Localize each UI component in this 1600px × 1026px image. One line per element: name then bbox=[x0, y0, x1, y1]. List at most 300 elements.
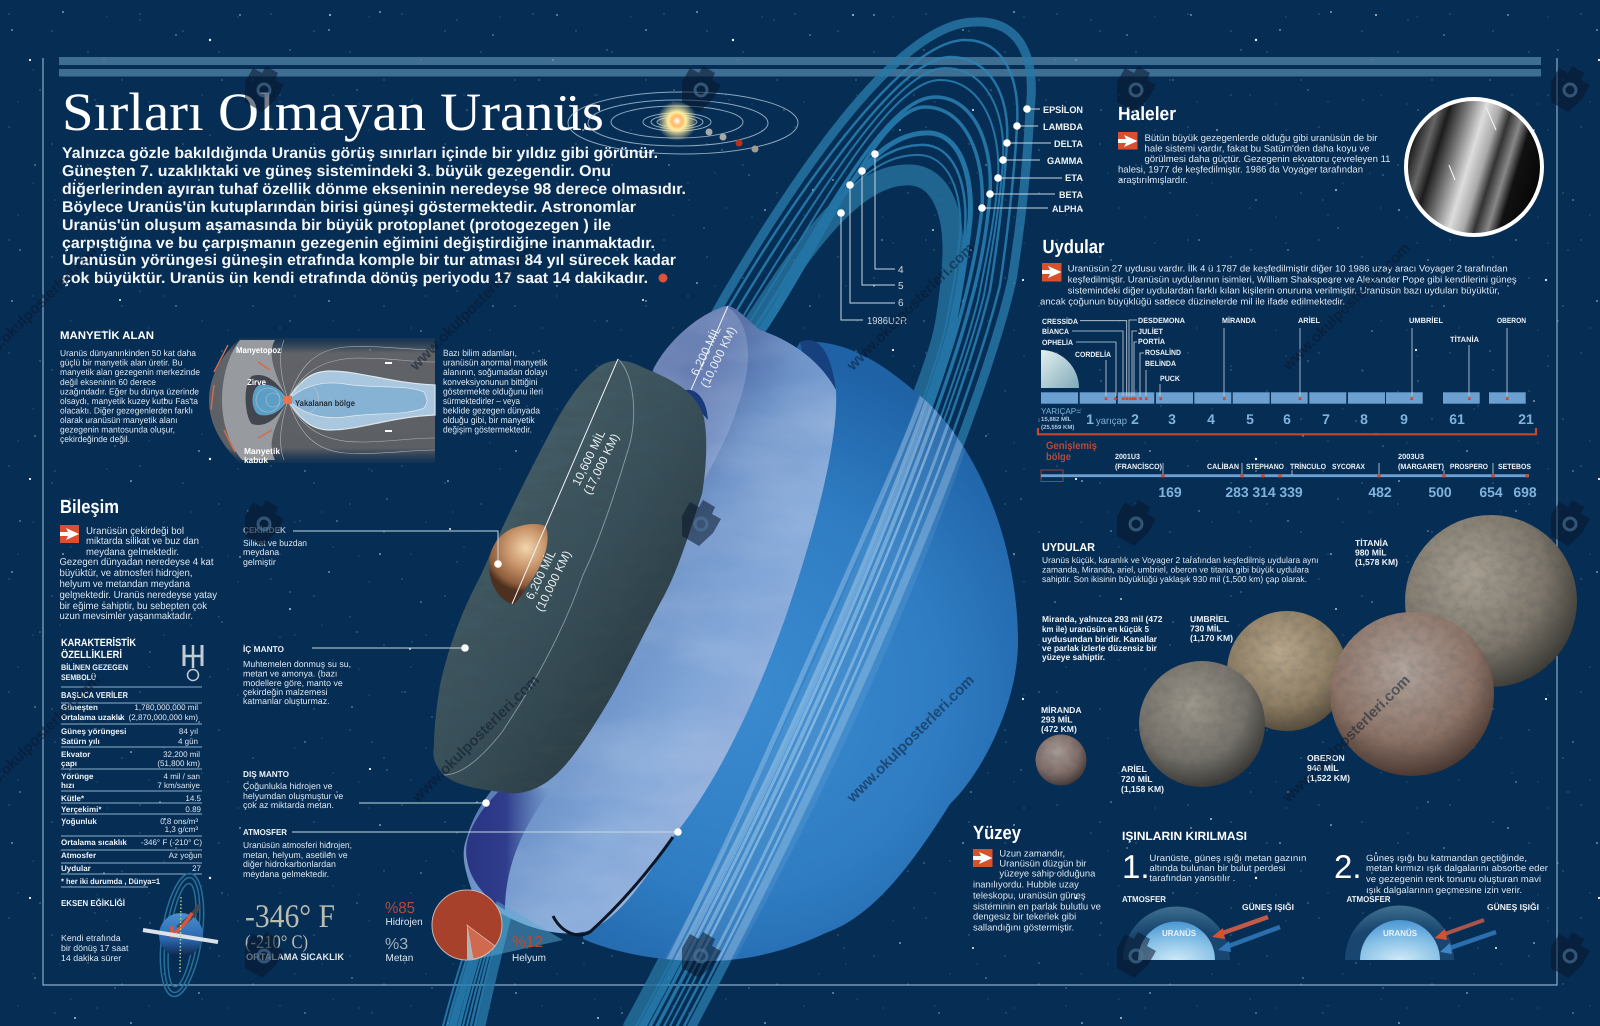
paragraph: sisteminin en parlak bulutlu ve bbox=[973, 900, 1101, 912]
outer moon names: CALİBAN bbox=[1207, 462, 1239, 471]
table values: 14.5 bbox=[185, 794, 202, 803]
ring labels left: 5 bbox=[898, 281, 904, 292]
moon names: CRESSİDA bbox=[1042, 317, 1078, 326]
step 2: URANÜS bbox=[1383, 928, 1417, 938]
radius numbers: YARIÇAP= bbox=[1041, 406, 1081, 416]
paragraph left: gezegenin mantosunda oluşur, bbox=[60, 424, 175, 434]
moon labels: (1,158 KM) bbox=[1121, 784, 1164, 794]
distances: 169 bbox=[1158, 484, 1182, 500]
radius numbers: 61 bbox=[1449, 411, 1465, 427]
ring labels right bbox=[978, 104, 1083, 215]
icon: red arrow bbox=[60, 525, 79, 543]
outer moon names: (MARGARET) bbox=[1398, 462, 1444, 471]
outer moon names: STEPHANO bbox=[1246, 462, 1284, 471]
table values: Yoğunluk bbox=[61, 817, 97, 826]
zone label: bölge bbox=[1046, 451, 1071, 463]
table values: 0,8 ons/m³ bbox=[160, 817, 198, 826]
composition pie chart bbox=[385, 890, 563, 964]
table values: Az yoğun bbox=[169, 851, 202, 860]
radius numbers: 1 bbox=[1086, 411, 1094, 427]
heading: Bileşim bbox=[60, 497, 119, 518]
leader lines bbox=[1072, 320, 1507, 396]
watermark: website text bbox=[0, 240, 1414, 807]
table values: Ekvator bbox=[61, 750, 90, 759]
table values: -346° F (-210° C) bbox=[141, 838, 202, 847]
paragraph: Uranüsün çekirdeği bol bbox=[86, 526, 184, 537]
heading: Yüzey bbox=[973, 823, 1021, 844]
panel: large moons bbox=[1036, 515, 1577, 794]
watermark: website text: www.okulposterleri.com bbox=[1279, 240, 1414, 375]
table values: (51,800 km) bbox=[157, 759, 200, 768]
paragraph bbox=[60, 526, 217, 622]
table values: Uydular bbox=[61, 864, 91, 873]
paragraph: Bütün büyük gezegenlerde olduğu gibi uranüsün de bir bbox=[1144, 133, 1378, 144]
radius numbers: 5 bbox=[1246, 411, 1254, 427]
moon labels: TİTANİA bbox=[1355, 538, 1388, 548]
rings of Uranus behind the planet bbox=[442, 22, 1031, 1026]
table values: 84 yıl bbox=[179, 727, 198, 736]
moon labels: (1,170 KM) bbox=[1190, 633, 1233, 643]
watermark: website text: www.okulposterleri.com bbox=[1279, 672, 1414, 807]
label: outer mantle: Çoğunlukla hidrojen ve bbox=[243, 781, 333, 791]
ring labels right: LAMBDA bbox=[1043, 122, 1083, 133]
radius numbers: 9 bbox=[1400, 411, 1408, 427]
label: core: Silikat ve buzdan bbox=[243, 538, 307, 548]
dome 2 bbox=[1345, 905, 1454, 960]
radius numbers: 7 bbox=[1322, 411, 1330, 427]
paragraph right: olduğu gibi, bir manyetik bbox=[443, 415, 535, 425]
paragraph left: değil ekseninin 60 derece bbox=[60, 377, 156, 387]
rim of atmosphere opening bbox=[800, 340, 836, 390]
chart: moon distance scale bbox=[1038, 316, 1536, 434]
moon labels: (1,578 KM) bbox=[1355, 557, 1398, 567]
heading: MANYETİK ALAN bbox=[60, 329, 154, 342]
magnetosphere diagram: Zirve bbox=[247, 377, 266, 387]
temperature: -346° F bbox=[245, 899, 335, 935]
moon names: PORTİA bbox=[1138, 337, 1165, 346]
paragraph: Kendi etrafında bbox=[61, 933, 121, 943]
panel: magnetic field bbox=[60, 329, 548, 465]
label: outer mantle: çok az miktarda metan. bbox=[243, 800, 334, 810]
radius numbers: 6 bbox=[1283, 411, 1291, 427]
paragraph: yüzeye sahip olduğuna bbox=[999, 868, 1096, 878]
step 1: GÜNEŞ IŞIĞI bbox=[1242, 902, 1294, 912]
panel: characteristics table bbox=[61, 637, 202, 887]
intro text: Güneşten 7. uzaklıktaki ve güneş sistemindeki 3. büyük gezegendir. Onu bbox=[62, 163, 611, 180]
Miranda note: yüzeye sahiptir. bbox=[1042, 652, 1105, 662]
paragraph right: sürmektedirler – veya bbox=[443, 396, 520, 406]
watermark: website text: www.okulposterleri.com bbox=[843, 672, 978, 807]
paragraph: keşfedilmiştir. Uranüsün uydularının isimleri, William Shakspeare ve Alexander Pope gibi kendilerini güneş bbox=[1068, 274, 1517, 284]
radius numbers: 15,882 MİL bbox=[1041, 415, 1072, 423]
outer moon names bbox=[1115, 452, 1531, 471]
watermark: camera icons bbox=[245, 66, 1590, 978]
table values: Ortalama uzaklık bbox=[61, 713, 125, 722]
ring photo bbox=[1406, 99, 1542, 235]
radius numbers: (25,559 KM) bbox=[1041, 424, 1074, 431]
mantle section outline bbox=[444, 359, 634, 775]
magnetosphere diagram: kabuk bbox=[244, 455, 268, 465]
moon names: TİTANİA bbox=[1450, 335, 1480, 344]
panel: rings bbox=[1118, 99, 1542, 235]
label: core: meydana bbox=[243, 547, 279, 557]
paragraph: meydana gelmektedir. bbox=[86, 547, 179, 558]
step 2: ışık dalgalarının geçmesine izin verir. bbox=[1366, 885, 1522, 895]
planet cutaway bbox=[433, 306, 1018, 961]
ring labels right: BETA bbox=[1059, 190, 1083, 201]
ring labels right: DELTA bbox=[1054, 139, 1083, 150]
ring labels right: EPSİLON bbox=[1043, 104, 1083, 116]
moon names: MİRANDA bbox=[1222, 316, 1256, 325]
paragraph right: Bazı bilim adamları, bbox=[443, 348, 517, 358]
moon: Oberon bbox=[1330, 612, 1494, 776]
paragraph left: güçlü bir manyetik alan üretir. Bu bbox=[60, 358, 183, 368]
moon: Miranda bbox=[1036, 734, 1086, 786]
table values: Satürn yılı bbox=[61, 737, 100, 746]
paragraph right bbox=[443, 348, 548, 434]
label: inner mantle: çekirdeğin malzemesi bbox=[243, 687, 328, 697]
table values: 4 mil / san bbox=[164, 772, 200, 781]
radius numbers: 2 bbox=[1131, 411, 1139, 427]
moon labels: (1,522 KM) bbox=[1307, 773, 1350, 783]
moon names bbox=[1042, 316, 1526, 383]
table values: BAŞLICA VERİLER bbox=[61, 690, 128, 700]
step 2: ATMOSFER bbox=[1346, 894, 1390, 904]
moon labels: ARİEL bbox=[1121, 764, 1147, 774]
ring labels right: GAMMA bbox=[1047, 156, 1083, 167]
label: atmosphere: meydana gelmektedir. bbox=[243, 869, 329, 879]
radius numbers: 4 bbox=[1207, 411, 1215, 427]
label: inner mantle: İÇ MANTO bbox=[243, 644, 284, 654]
paragraph: sistemindeki diğer uydulardan farklı kılan kişilerin onuruna verilmiştir. Uranüsün bazı uyduları büyüktür, bbox=[1068, 286, 1500, 296]
paragraph left: uzağındadır. Eğer bu dünya üzerinde bbox=[60, 386, 199, 396]
mantle texture bbox=[433, 361, 706, 793]
label: inner mantle bbox=[243, 644, 469, 706]
rings passing in front of the planet bbox=[664, 395, 966, 961]
paragraph: ancak çoğunun büyüklüğü sadece düzinelerde mil ile ifade edilmektedir. bbox=[1040, 296, 1345, 306]
step 2: Güneş ışığı bu katmandan geçtiğinde, bbox=[1366, 853, 1527, 863]
title: Sırları Olmayan Uranüs bbox=[62, 82, 604, 142]
moon labels: (472 KM) bbox=[1041, 724, 1077, 734]
helium slice bbox=[467, 925, 495, 959]
step 1: ATMOSFER bbox=[1122, 894, 1166, 904]
paragraph left bbox=[60, 348, 200, 444]
inner mantle bbox=[433, 361, 706, 793]
moon names: CORDELİA bbox=[1075, 350, 1111, 359]
paragraph right: alanının, soğumadan dolayı bbox=[443, 367, 548, 377]
step 1: tarafından yansıtılır . bbox=[1149, 873, 1235, 883]
moon names: DESDEMONA bbox=[1138, 316, 1185, 325]
paragraph: bir eğime sahiptir, bu sebepten çok bbox=[60, 601, 208, 612]
Miranda note: Miranda, yalnızca 293 mil (472 bbox=[1042, 614, 1163, 624]
outer moon names: 2001U3 bbox=[1115, 452, 1140, 461]
moon labels: OBERON bbox=[1307, 753, 1345, 763]
step 2: 2. bbox=[1334, 848, 1362, 885]
table values: Güneş yörüngesi bbox=[61, 727, 126, 736]
outer mantle band bbox=[464, 306, 836, 933]
paragraph right: değişim göstermektedir. bbox=[443, 424, 532, 434]
paragraph bbox=[61, 933, 129, 963]
moon labels: 720 MİL bbox=[1121, 774, 1153, 784]
inner indigo shell bbox=[466, 788, 552, 910]
axis illustration bbox=[143, 871, 218, 999]
label: inner mantle: katmanlar oluşturmaz. bbox=[243, 696, 330, 706]
moon labels: 293 MİL bbox=[1041, 714, 1073, 724]
paragraph left: çekirdeğinde değil. bbox=[60, 434, 130, 444]
radius numbers: 8 bbox=[1360, 411, 1368, 427]
step 2: GÜNEŞ IŞIĞI bbox=[1487, 902, 1539, 912]
panel: moons intro bbox=[1040, 237, 1517, 306]
outer moon names: 2003U3 bbox=[1398, 452, 1424, 461]
black seam between layers bbox=[553, 837, 673, 935]
paragraph: gelmektedir. Uranüs neredeyse yatay bbox=[60, 590, 217, 601]
Miranda note: km ile) uranüsün en küçük 5 bbox=[1042, 624, 1149, 634]
moon names: ROSALİND bbox=[1145, 348, 1181, 357]
distances: 698 bbox=[1513, 484, 1537, 500]
paragraph: Uranüsün 27 uydusu vardır. İlk 4 ü 1787 de keşfedilmiştir diğer 10 1986 uzay aracı Voyager 2 tarafından bbox=[1068, 264, 1508, 274]
distances: 314 bbox=[1252, 484, 1276, 500]
Miranda note: ve parlak izlerle düzensiz bir bbox=[1042, 643, 1158, 653]
table values bbox=[61, 690, 202, 886]
paragraph left: Uranüs dünyanınkinden 50 kat daha bbox=[60, 348, 196, 358]
paragraph: 14 dakika sürer bbox=[61, 953, 121, 963]
step 1: altında bulunan bir bulut perdesi bbox=[1149, 863, 1285, 873]
heading: SEMBOLÜ bbox=[61, 673, 96, 682]
table values: 1,780,000,000 mil bbox=[134, 703, 198, 712]
intro text bbox=[62, 145, 686, 287]
arrows 2 bbox=[1442, 920, 1484, 935]
distances: 654 bbox=[1479, 484, 1503, 500]
moon names: OPHELİA bbox=[1042, 338, 1073, 347]
label: outer mantle bbox=[243, 769, 490, 810]
paragraph: Gezegen dünyadan neredeyse 4 kat bbox=[60, 557, 214, 568]
paragraph: sallandığını göstermiştir. bbox=[973, 922, 1074, 932]
red bracket bbox=[1038, 428, 1536, 434]
Miranda note: uydusundan biridir. Kanallar bbox=[1042, 634, 1158, 644]
panel: light refraction bbox=[1122, 829, 1548, 960]
outer moon names: SYCORAX bbox=[1332, 462, 1365, 471]
moon names: OBERON bbox=[1497, 316, 1526, 325]
table values: 0.89 bbox=[185, 805, 202, 814]
intro text: Böylece Uranüs'ün kutuplarından birisi güneşi göstermektedir. Astronomlar bbox=[62, 199, 636, 216]
table values: hızı bbox=[61, 781, 74, 790]
paragraph bbox=[1040, 264, 1517, 306]
intro text: Yalnızca gözle bakıldığında Uranüs görüş sınırları içinde bir yıldız gibi görünür. bbox=[62, 145, 658, 162]
moon names: PUCK bbox=[1160, 374, 1180, 383]
paragraph: dengesiz bir tekerlek gibi bbox=[973, 910, 1076, 922]
heading: Uydular bbox=[1042, 237, 1105, 258]
dimension: 6,200 mil upper: (10,000 KM) bbox=[698, 324, 739, 390]
panel: surface bbox=[973, 823, 1101, 932]
moon labels: 730 MİL bbox=[1190, 624, 1222, 634]
step 1: URANÜS bbox=[1162, 928, 1196, 938]
paragraph: Uzun zamandır, bbox=[999, 848, 1065, 858]
dimension: 10,600 mil: 10,600 MİL bbox=[569, 428, 608, 488]
dimension: 6,200 mil lower: 6,200 MİL bbox=[523, 548, 559, 602]
magnetosphere diagram bbox=[209, 338, 435, 465]
zone label bbox=[1041, 440, 1097, 482]
temperature: ORTALAMA SICAKLIK bbox=[246, 952, 344, 963]
heading bbox=[61, 637, 136, 682]
heading: EKSEN EĞİKLİĞİ bbox=[61, 898, 125, 908]
table values: * her iki durumda , Dünya=1 bbox=[61, 877, 161, 886]
moon: Umbriel bbox=[1227, 611, 1347, 731]
pie labels: %3 bbox=[385, 936, 408, 953]
paragraph right: beklide gezegen dünyada bbox=[443, 405, 540, 415]
paragraph bbox=[973, 848, 1101, 932]
table values: çapı bbox=[61, 759, 77, 768]
icon: red arrow bbox=[1118, 132, 1138, 150]
paragraph: sahiptir. Son ikisinin büyüklüğü yaklaşık 930 mil (1,500 km) çap olarak. bbox=[1042, 574, 1307, 584]
step 1: Uranüste, güneş ışığı metan gazının bbox=[1149, 853, 1306, 863]
label: inner mantle: Muhtemelen donmuş su su, bbox=[243, 659, 351, 669]
watermark: website text: www.okulposterleri.com bbox=[408, 672, 543, 807]
paragraph right: uranüsün anormal manyetik bbox=[443, 358, 548, 368]
paragraph left: olarak uranüsün manyetik alanı bbox=[60, 415, 178, 425]
icon: red arrow bbox=[1042, 263, 1062, 282]
mini planet bbox=[1041, 350, 1079, 388]
ring labels right: ETA bbox=[1065, 173, 1083, 184]
label: atmosphere: metan, helyum, asetilen ve bbox=[243, 850, 348, 860]
paragraph: miktarda silikat ve buz dan bbox=[86, 536, 199, 547]
temperature: (-210° C) bbox=[245, 932, 308, 953]
axis bbox=[1041, 474, 1529, 477]
intro text: Uranüs'ün oluşum aşamasında bir büyük protoplanet (protogezegen ) ile bbox=[62, 217, 611, 234]
moon labels: 980 MİL bbox=[1355, 548, 1387, 558]
distances: 482 bbox=[1368, 484, 1392, 500]
dome 1 bbox=[1123, 906, 1230, 960]
icon: mini solar system bbox=[568, 92, 798, 154]
paragraph left: olacaktı. Diğer gezegenlerden farklı bbox=[60, 405, 193, 415]
dimension: 6,200 mil upper: 6,200 MİL bbox=[688, 324, 724, 378]
core bbox=[489, 524, 548, 605]
label: atmosphere bbox=[243, 827, 682, 879]
label: outer mantle: DIŞ MANTO bbox=[243, 769, 289, 779]
magnetosphere diagram: Yakalanan bölge bbox=[295, 398, 355, 408]
ring labels left: 1986U2R bbox=[867, 316, 907, 327]
moon labels: MİRANDA bbox=[1041, 705, 1082, 715]
magnetosphere diagram: Manyetopoz bbox=[236, 345, 281, 355]
table values: Yerçekimi* bbox=[61, 805, 102, 814]
heading: IŞINLARIN KIRILMASI bbox=[1122, 829, 1247, 843]
table values: Güneşten bbox=[61, 703, 98, 712]
label: atmosphere: ATMOSFER bbox=[243, 827, 287, 837]
label: inner mantle: metan ve amonya. (bazı bbox=[243, 668, 337, 678]
step 2 bbox=[1334, 848, 1548, 960]
label: core bbox=[243, 525, 502, 568]
radius numbers: 21 bbox=[1518, 411, 1534, 427]
paragraph: inanılıyordu. Hubble uzay bbox=[973, 878, 1079, 890]
panel: composition bbox=[60, 497, 217, 622]
intro text: diğerlerinden ayıran tuhaf özellik dönme ekseninin neredeyse 98 derece olmasıdır. bbox=[62, 181, 686, 198]
table values: 1,3 g/cm³ bbox=[165, 825, 198, 834]
moon markers bbox=[1104, 397, 1509, 400]
distances bbox=[1158, 484, 1537, 500]
paragraph: görülmesi daha güçtür. Gezegenin ekvatoru çevreleyen 11 bbox=[1144, 154, 1390, 165]
paragraph bbox=[1042, 555, 1318, 584]
paragraph: bir dönüş 17 saat bbox=[61, 943, 129, 953]
paragraph: teleskopu, uranüsün güneş bbox=[973, 890, 1086, 900]
outer moon names: SETEBOS bbox=[1498, 462, 1531, 471]
paragraph: Uranüsün düzgün bir bbox=[999, 858, 1086, 868]
tick lines bbox=[1163, 463, 1493, 475]
paragraph: uzun mevsimler yaşanmaktadır. bbox=[60, 611, 193, 622]
paragraph: Uranüs küçük, karanlık ve Voyager 2 tarafından keşfedilmiş uydulara aynı bbox=[1042, 555, 1318, 565]
pie bbox=[432, 890, 502, 960]
paragraph left: manyetik alan gezegenin merkezinde bbox=[60, 367, 200, 377]
intro text: çok büyüktür. Uranüs ün kendi etrafında dönüş periyodu 17 saat 14 dakikadır. bbox=[62, 270, 648, 287]
table values: 7 km/saniye bbox=[157, 781, 201, 790]
table values: Ortalama sıcaklık bbox=[61, 838, 127, 847]
dimension: 6,200 mil lower: (10,000 KM) bbox=[533, 548, 574, 614]
watermark: website text: www.okulposterleri.com bbox=[843, 240, 978, 375]
paragraph left: olsaydı, manyetik kuzey kutbu Fas'ta bbox=[60, 396, 198, 406]
table values: Kütle* bbox=[61, 794, 85, 803]
intro text: çarpıştığına ve bu çarpışmanın gezegenin eğimini değiştirdiğine inanmaktadır. bbox=[62, 235, 655, 252]
dimension: 10,600 mil: (17,000 KM) bbox=[581, 431, 622, 497]
heading: KARAKTERİSTİK bbox=[61, 637, 136, 649]
label: inner mantle: modellere göre, manto ve bbox=[243, 678, 343, 688]
moon names: UMBRİEL bbox=[1409, 316, 1443, 325]
magnetosphere diagram: Manyetik bbox=[244, 446, 280, 456]
paragraph: hale sistemi vardır, fakat bu Satürn'den daha koyu ve bbox=[1144, 144, 1370, 154]
pie labels: %85 bbox=[385, 900, 415, 917]
outer blue atmosphere hemisphere bbox=[583, 342, 1018, 961]
label: atmosphere: diğer hidrokarbonlardan bbox=[243, 859, 336, 869]
step 2: ve gezegenin renk tonunu oluşturan mavi bbox=[1366, 874, 1541, 884]
pie labels: Hidrojen bbox=[386, 917, 423, 928]
paragraph: helyum ve metandan meydana bbox=[60, 579, 190, 590]
moon: Titania bbox=[1405, 515, 1577, 687]
paragraph right: konveksiyonunun bittiğini bbox=[443, 377, 538, 387]
paragraph: zamanda, Miranda, ariel, umbriel, oberon ve titania gibi büyük uydulara bbox=[1042, 564, 1309, 574]
label: core: gelmiştir bbox=[243, 557, 276, 567]
step 2: metan kırmızı ışık dalgalarını absorbe eder bbox=[1366, 863, 1548, 873]
zone label: Genişlemiş bbox=[1046, 440, 1097, 452]
moon names: ARİEL bbox=[1298, 316, 1320, 325]
outer moon names: PROSPERO bbox=[1450, 462, 1488, 471]
table rules bbox=[61, 687, 202, 887]
moon names: BELİNDA bbox=[1145, 359, 1176, 368]
radius numbers: 3 bbox=[1168, 411, 1176, 427]
diameter lines bbox=[512, 306, 728, 604]
intro text: Uranüsün yörüngesi güneşin etrafında komple bir tur atması 84 yıl sürecek kadar bbox=[62, 252, 676, 269]
heading: UYDULAR bbox=[1042, 542, 1096, 554]
cloud texture bbox=[464, 306, 836, 933]
radius numbers bbox=[1041, 406, 1534, 431]
arrows 1 bbox=[1220, 917, 1268, 934]
pie labels: %12 bbox=[512, 934, 543, 951]
outer moon names: (FRANCİSCO) bbox=[1115, 462, 1162, 471]
watermark: website text: www.okulposterleri.com bbox=[406, 240, 541, 375]
distances: 500 bbox=[1428, 484, 1452, 500]
heading: Haleler bbox=[1118, 104, 1177, 125]
table values: (2,870,000,000 km) bbox=[129, 713, 198, 722]
panel: axis tilt bbox=[61, 871, 218, 999]
top lobe highlight bbox=[653, 306, 748, 490]
methane slice bbox=[467, 925, 473, 960]
moon names: BİANCA bbox=[1042, 327, 1069, 336]
heading: ÖZELLİKLERİ bbox=[61, 649, 122, 661]
table values: 4 gün bbox=[178, 737, 198, 746]
radius numbers: yarıçap bbox=[1096, 416, 1127, 427]
pie labels bbox=[385, 900, 546, 964]
icon: Uranus symbol bbox=[184, 645, 202, 680]
label: outer mantle: helyumdan oluşmuştur ve bbox=[243, 791, 343, 801]
table values: Yörünge bbox=[61, 772, 94, 781]
pie labels: Helyum bbox=[512, 953, 546, 964]
ring labels left: 4 bbox=[898, 265, 904, 276]
